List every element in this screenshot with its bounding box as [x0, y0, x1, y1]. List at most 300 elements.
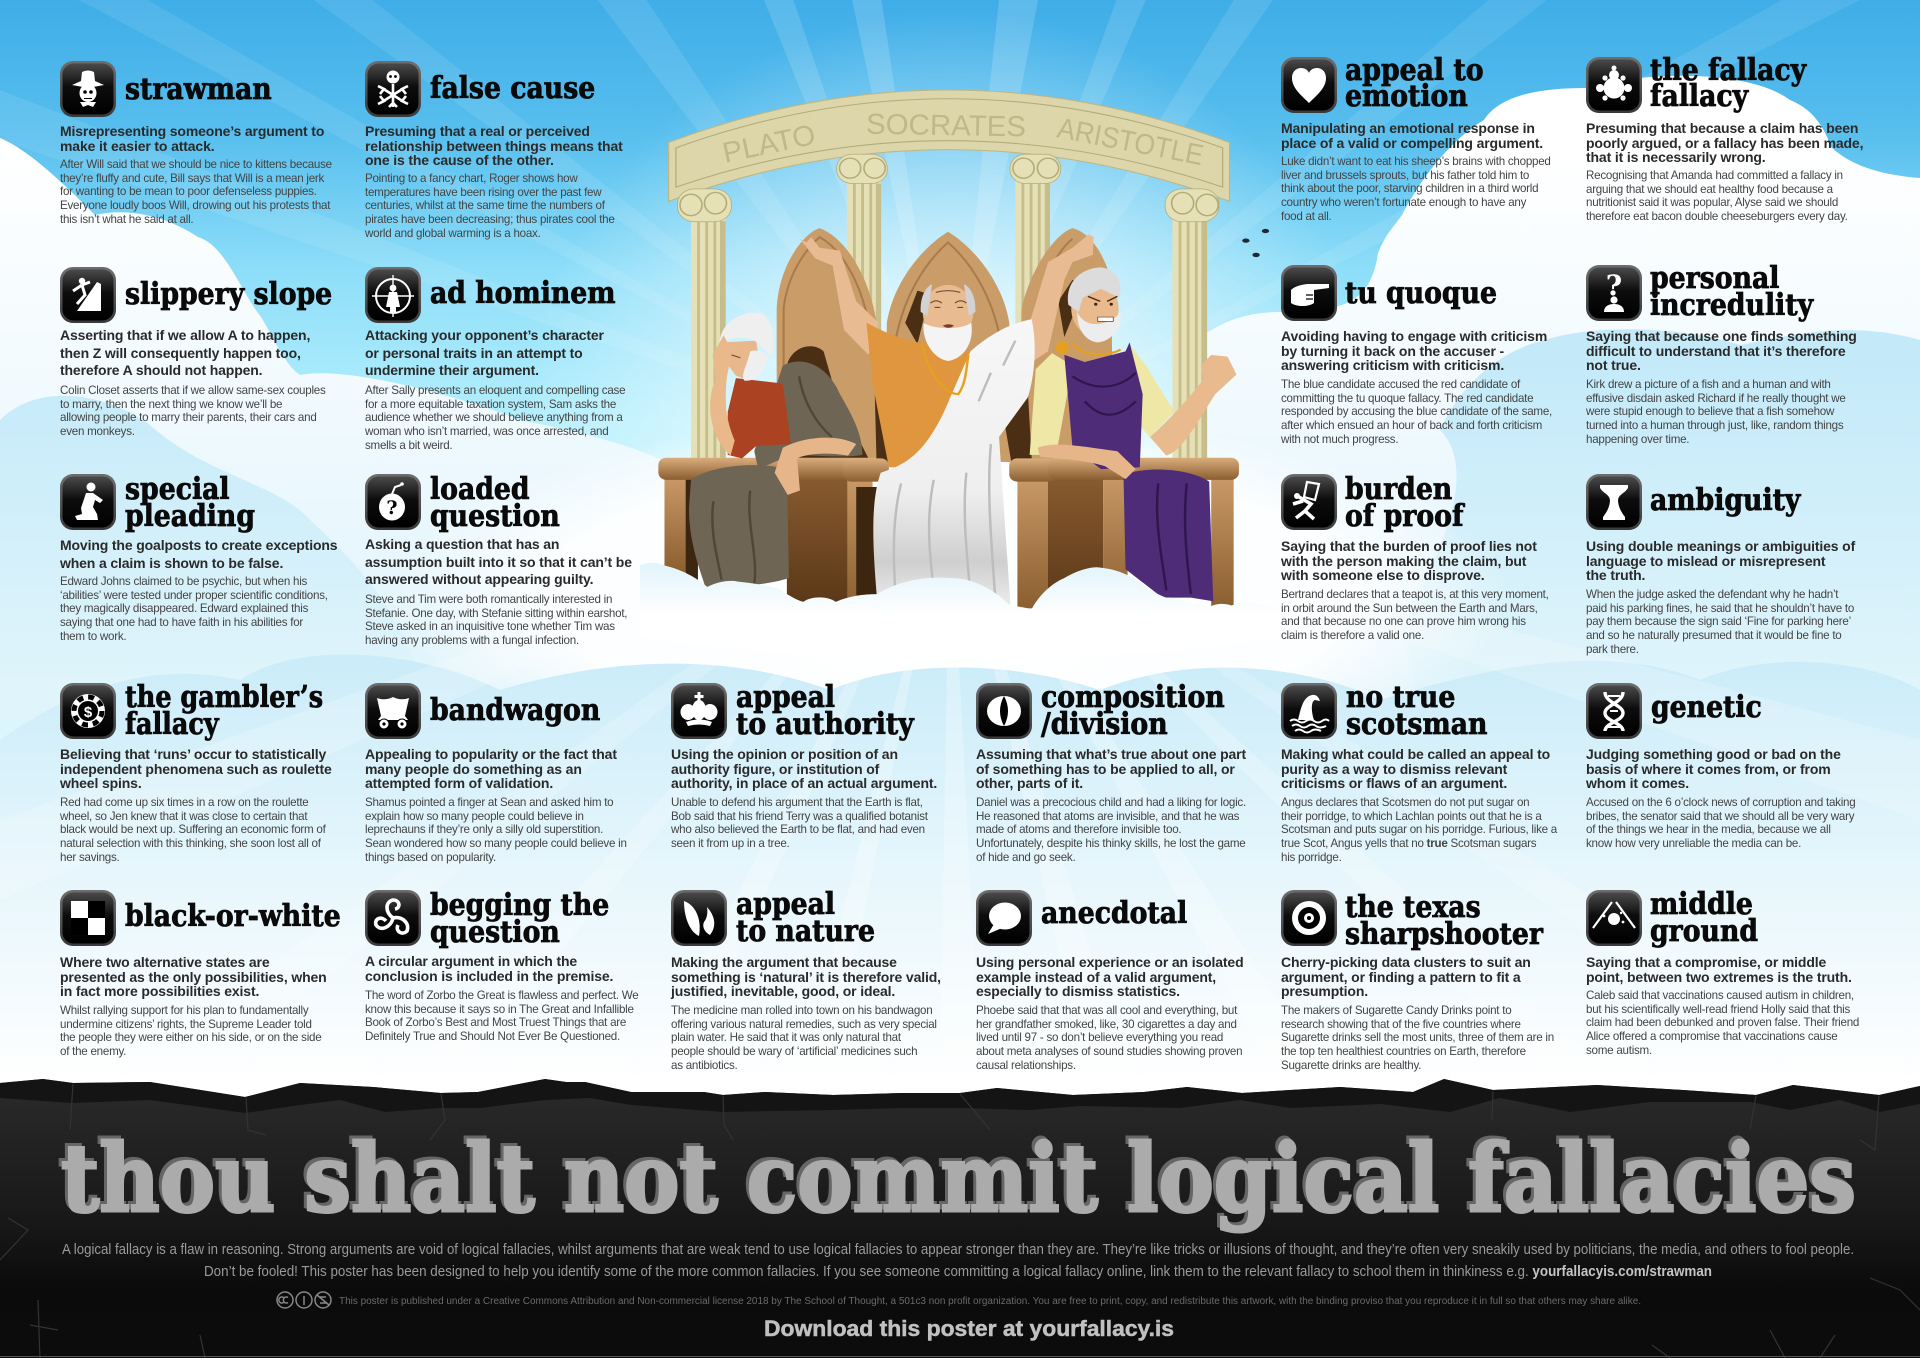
definition: answered without appearing guilty.: [365, 571, 593, 587]
card: ambiguity: [1586, 474, 1871, 659]
example: Steve and Tim were both romantically interested in: [365, 593, 612, 606]
definition: Where two alternative states are: [60, 954, 270, 970]
example: arguing that we should eat healthy food because a: [1586, 183, 1833, 196]
icon: figure on slope: [60, 267, 116, 323]
definition: authority figure, or institution of: [671, 761, 879, 777]
definition: make it easier to attack.: [60, 138, 214, 154]
title: the gambler’s: [124, 680, 323, 715]
example: in orbit around the Sun between the Earth and Mars,: [1281, 602, 1538, 615]
title: [1040, 684, 1224, 738]
example: The blue candidate accused the red candidate of: [1281, 378, 1520, 391]
definition: Presuming that because a claim has been: [1586, 120, 1858, 136]
example: undermine citizens’ rights, the Supreme Leader told: [60, 1018, 312, 1031]
icon: poker chip: $: [84, 704, 93, 721]
icon: bomb: ?: [386, 497, 398, 519]
definition: basis of where it comes from, or from: [1586, 761, 1831, 777]
example: park there.: [1586, 643, 1639, 656]
icon: pointing hand: [1281, 265, 1337, 321]
card: personal incredulity: [1586, 265, 1871, 450]
card: the texas sharpshooter: [1281, 890, 1566, 1075]
title: emotion: [1344, 79, 1467, 114]
example: true Scot, Angus yells that no true Scotsman sugars: [1281, 837, 1536, 850]
footer band with cracked stone edge: [0, 1079, 1920, 1358]
definition: relationship between things means that: [365, 138, 623, 154]
example: and that because no one can prove him wrong his: [1281, 615, 1526, 628]
definition: Making what could be called an appeal to: [1281, 746, 1550, 762]
title: pleading: [124, 499, 254, 534]
title: appeal: [736, 887, 835, 922]
example: even monkeys.: [60, 425, 135, 438]
definition: [60, 746, 332, 791]
definition: Asking a question that has an: [365, 536, 559, 552]
definition: conclusion is included in the premise.: [365, 968, 613, 984]
example: her grandfather smoked, like, 30 cigarettes a day and: [976, 1018, 1237, 1031]
icon: checker: [60, 890, 116, 946]
flying birds: [1242, 229, 1269, 257]
example: for a more equitable taxation system, Sam asks the: [365, 398, 616, 411]
definition: or personal traits in an attempt to: [365, 344, 583, 360]
example: explain how so many people could believe in: [365, 810, 584, 823]
sun rays: [0, 0, 1920, 640]
example: [365, 796, 627, 864]
example: this isn’t what he said at all.: [60, 213, 193, 226]
example: Everyone loudly boos Will, drowing out his protests that: [60, 199, 330, 212]
example: Steve asked in an inquisitive tone whether Tim was: [365, 620, 615, 633]
icon: target: [1281, 890, 1337, 946]
example: Unfortunately, despite his thinky skills, he lost the game: [976, 837, 1245, 850]
icon: heart: [1281, 57, 1337, 113]
definition: [1586, 747, 1841, 791]
definition: [365, 123, 623, 168]
definition: answering criticism with criticism.: [1281, 357, 1504, 373]
card: appeal to emotion: [1281, 57, 1566, 225]
icon: scarecrow: [60, 61, 116, 117]
card: middle ground: [1586, 890, 1871, 1060]
example: things based on popularity.: [365, 851, 496, 864]
license text: This poster is published under a Creative Commons Attribution and Non-commercial license 2018 by The School of Thought, a 501c3 non profit organization. You are free to print, copy, and redistribute this artwork, with the binding proviso that you reproduce it in full so that others may share alike.: [339, 1296, 1641, 1307]
icon: wagon: [365, 683, 421, 739]
example: [976, 796, 1246, 865]
title: [1344, 894, 1542, 948]
title: [1650, 265, 1813, 319]
title: [1346, 684, 1487, 738]
definition: [671, 955, 941, 999]
intro text: Don’t be fooled! This poster has been designed to help you identify some of the more common fallacies. If you see someone committing a logical fallacy online, link them to the relevant fallacy to school them in thinkiness e.g. yourfallacyis.com/strawman: [204, 1263, 1712, 1280]
example: Red had come up six times in a row on the roulette: [60, 796, 308, 809]
icon: leaves: [671, 890, 727, 946]
card: loaded question: [365, 472, 632, 647]
definition: Using the opinion or position of an: [671, 746, 898, 762]
icon: question mark and person: [1586, 265, 1642, 321]
definition: wheel spins.: [60, 775, 142, 791]
definition: not true.: [1586, 357, 1641, 373]
title: incredulity: [1650, 288, 1813, 323]
definition: [1281, 329, 1547, 373]
title: anecdotal: [1040, 896, 1187, 931]
example: wheel, so Jen knew that it was close to certain that: [60, 810, 307, 823]
definition: something is ‘natural’ it is therefore valid,: [671, 969, 941, 985]
definition: many people do something as an: [365, 761, 582, 777]
title: composition: [1040, 680, 1224, 715]
example: Sean wondered how so many people could believe in: [365, 837, 627, 850]
title: to authority: [736, 707, 913, 742]
example: The medicine man rolled into town on his bandwagon: [671, 1004, 932, 1017]
example: saying that one had to have faith in his abilities for: [60, 616, 303, 629]
title: appeal: [736, 680, 835, 715]
title: sharpshooter: [1344, 917, 1542, 952]
example: her savings.: [60, 851, 120, 864]
definition: presented as the only possibilities, when: [60, 969, 327, 985]
example: Bob said that his friend Terry was a qualified botanist: [671, 810, 928, 823]
example: [60, 158, 332, 226]
example: [1586, 378, 1846, 447]
definition: independent phenomena such as roulette: [60, 761, 332, 777]
definition: Avoiding having to engage with criticism: [1281, 328, 1547, 344]
example: offering various natural remedies, such as very special: [671, 1018, 937, 1031]
definition: Manipulating an emotional response in: [1281, 120, 1535, 136]
example: [365, 593, 627, 647]
example: after which ensued an hour of back and forth criticism: [1281, 419, 1542, 432]
example: Scotsman and puts sugar on his porridge. Furious, like a: [1281, 823, 1557, 836]
card: the fallacy fallacy: [1586, 57, 1871, 227]
example: [1281, 796, 1557, 865]
card: genetic: [1586, 683, 1871, 853]
columns and arch: [669, 90, 1230, 466]
card: slippery slope: [60, 267, 332, 438]
title: scotsman: [1346, 707, 1487, 742]
example: [365, 384, 626, 452]
Plato: [689, 313, 862, 587]
title: slippery slope: [124, 277, 332, 312]
card: false cause: [365, 61, 623, 240]
title: personal: [1650, 261, 1779, 296]
title: special: [124, 472, 229, 507]
definition: [60, 123, 324, 154]
example: their porridge, to which Lachlan points out that he is a: [1281, 810, 1542, 823]
example: who also believed the Earth to be flat, and had even: [671, 823, 925, 836]
example: they’re fluffy and cute, Bill says that Will is a mean jerk: [60, 172, 324, 185]
example: Book of Zorbo’s Best and Most Truest Things that are: [365, 1016, 626, 1029]
icon: crosshair: [365, 267, 421, 323]
example: natural selection with this thinking, she soon lost all of: [60, 837, 321, 850]
definition: the truth.: [1586, 567, 1645, 583]
definition: therefore A should not happen.: [60, 362, 262, 378]
example: Daniel was a precocious child and had a liking for logic.: [976, 796, 1246, 809]
definition: when a claim is shown to be false.: [60, 555, 283, 571]
definition: criticisms or flaws of an argument.: [1281, 775, 1507, 791]
title: black-or-white: [124, 899, 340, 934]
example: woman who isn’t married, was once arrested, and: [365, 425, 608, 438]
card: begging the question: [365, 890, 650, 1046]
example: to marry, then the next thing we know we’ll be: [60, 398, 282, 411]
Aristotle: [1030, 267, 1236, 601]
definition: difficult to understand that it’s therefore: [1586, 343, 1845, 359]
definition: that it is necessarily wrong.: [1586, 149, 1766, 165]
example: some autism.: [1586, 1044, 1652, 1057]
card: tu quoque: [1281, 265, 1566, 450]
title: appeal to: [1344, 53, 1483, 88]
example: of hide and go seek.: [976, 851, 1075, 864]
title: tu quoque: [1344, 276, 1497, 311]
definition: Making the argument that because: [671, 954, 897, 970]
definition: Assuming that what’s true about one part: [976, 746, 1246, 762]
icon: overlapping circles: [976, 683, 1032, 739]
title: the fallacy: [1650, 53, 1806, 88]
example: paid his parking fines, he said that he shouldn’t have to: [1586, 602, 1854, 615]
icon: poker chip: [60, 683, 116, 739]
example: research showing that of the five countries where: [1281, 1018, 1521, 1031]
title: [1650, 58, 1806, 110]
definition: Judging something good or bad on the: [1586, 746, 1841, 762]
example: country who weren’t fortunate enough to have any: [1281, 196, 1526, 209]
example: black would be next up. Suffering an economic form of: [60, 823, 326, 836]
card: ad hominem: [365, 267, 626, 452]
title: ambiguity: [1650, 483, 1800, 518]
title: genetic: [1650, 690, 1761, 725]
example: [671, 796, 928, 850]
definition: [60, 955, 327, 999]
definition: then Z will consequently happen too,: [60, 344, 301, 360]
title: [124, 680, 323, 742]
example: When the judge asked the defendant why he hadn’t: [1586, 588, 1838, 601]
example: they magically disappeared. Edward explained this: [60, 602, 308, 615]
example: the top ten healthiest countries on Earth, therefore: [1281, 1045, 1526, 1058]
definition: of something has to be applied to all, or: [976, 761, 1235, 777]
example: seen it from up in a tree.: [671, 837, 790, 850]
definition: by turning it back on the accuser -: [1281, 343, 1504, 359]
example: [365, 989, 638, 1044]
definition: place of a valid or compelling argument.: [1281, 134, 1543, 150]
icon: figure under teapot block: [1281, 474, 1337, 530]
title: [430, 472, 560, 534]
example: them to work.: [60, 630, 126, 643]
example: smells a bit weird.: [365, 439, 452, 452]
definition: Cherry-picking data clusters to suit an: [1281, 954, 1531, 970]
title: burden: [1344, 472, 1452, 507]
title: fallacy: [1650, 79, 1748, 114]
example: Whilst rallying support for his plan to fundamentally: [60, 1004, 308, 1017]
example: Caleb said that vaccinations caused autism in children,: [1586, 989, 1854, 1002]
example: people should be wary of ‘artificial’ medicines such: [671, 1045, 917, 1058]
definition: [976, 955, 1244, 999]
creative commons icons: [277, 1292, 331, 1308]
definition: [365, 327, 604, 378]
example: Luke didn’t want to eat his sheep’s brains with chopped: [1281, 155, 1551, 168]
example: lived until 97 - so don’t believe everything you read: [976, 1031, 1223, 1044]
icon: road and splat: [1586, 890, 1642, 946]
example: nutritionist said it was popular, Alyse said we should: [1586, 196, 1838, 209]
example: about meta analyses of sound studies showing proven: [976, 1045, 1242, 1058]
definition: Moving the goalposts to create exceptions: [60, 537, 337, 553]
example: made of atoms and therefore invisible too.: [976, 823, 1181, 836]
title: ground: [1650, 914, 1758, 949]
example: [60, 796, 326, 864]
example: [60, 575, 328, 643]
example: After Sally presents an eloquent and compelling case: [365, 384, 625, 397]
example: [1281, 588, 1549, 643]
definition: presumption.: [1281, 983, 1368, 999]
definition: [365, 746, 617, 791]
icon: vase and faces: [1586, 474, 1642, 530]
title: strawman: [124, 72, 271, 107]
example: [1586, 989, 1859, 1058]
icon: triskele: [365, 890, 421, 946]
example: pirates have been decreasing; thus pirates cool the: [365, 213, 615, 226]
example: audience whether we should believe anything from a: [365, 411, 623, 424]
example: but his scientifically well-read friend Holly said that this: [1586, 1003, 1850, 1016]
example: [976, 1004, 1242, 1073]
definition: language to mislead or misrepresent: [1586, 553, 1825, 569]
arch inscriptions: PLATO: [720, 119, 818, 170]
example: Alice offered a compromise that vaccinations cause: [1586, 1030, 1838, 1043]
card: composition/division: [976, 683, 1261, 868]
definition: [60, 327, 310, 378]
title: question: [430, 915, 559, 950]
example: having any problems with a fungal infection.: [365, 634, 579, 647]
example: [1281, 155, 1551, 224]
example: [1586, 169, 1848, 224]
icon: skull snowflake: [365, 61, 421, 117]
definition: Asserting that if we allow A to happen,: [60, 327, 310, 343]
example: turned into a human through just, like, random things: [1586, 419, 1843, 432]
definition: [1281, 539, 1537, 583]
icon: speech bubble: [976, 890, 1032, 946]
card: burden of proof: [1281, 474, 1566, 646]
definition: Saying that because one finds something: [1586, 328, 1857, 344]
example: and so he naturally presumed that it would be fine to: [1586, 629, 1842, 642]
icon: DNA helix: [1586, 683, 1642, 739]
title: [124, 472, 255, 534]
card: special pleading: [60, 472, 337, 643]
example: Unable to defend his argument that the Earth is flat,: [671, 796, 923, 809]
definition: whom it comes.: [1586, 775, 1689, 791]
definition: Believing that ‘runs’ occur to statistically: [60, 746, 326, 762]
title: fallacy: [124, 707, 218, 742]
card: anecdotal: [976, 890, 1261, 1075]
clouds: [0, 76, 1920, 1090]
example: He reasoned that atoms are invisible, and that he was: [976, 810, 1239, 823]
example: his porridge.: [1281, 851, 1342, 864]
definition: example instead of a valid argument,: [976, 969, 1216, 985]
example: committing the tu quoque fallacy. The red candidate: [1281, 392, 1533, 405]
definition: attempted form of validation.: [365, 775, 553, 791]
definition: undermine their argument.: [365, 362, 539, 378]
title: the texas: [1344, 890, 1480, 925]
example: Bertrand declares that a teapot is, at this very moment,: [1281, 588, 1549, 601]
example: with not much progress.: [1281, 433, 1398, 446]
definition: [976, 747, 1246, 791]
title: loaded: [430, 472, 529, 507]
title: middle: [1650, 887, 1752, 922]
example: Colin Closet asserts that if we allow same-sex couples: [60, 384, 326, 397]
example: of the enemy.: [60, 1045, 126, 1058]
example: Stefanie. One day, with Stefanie sitting within earshot,: [365, 607, 627, 620]
definition: Misrepresenting someone’s argument to: [60, 123, 324, 139]
example: pay them because the sign said ‘Fine for parking here’: [1586, 615, 1851, 628]
example: After Will said that we should be nice to kittens because: [60, 158, 332, 171]
definition: [365, 954, 613, 984]
example: food at all.: [1281, 210, 1332, 223]
definition: Using double meanings or ambiguities of: [1586, 538, 1855, 554]
example: for wanting to be mean to poor defenseless puppies.: [60, 185, 317, 198]
arch inscriptions: [720, 109, 1206, 172]
example: Definitely True and Should Not Ever Be Questioned.: [365, 1030, 620, 1043]
example: centuries, whilst at the same time the numbers of: [365, 199, 605, 212]
example: Recognising that Amanda had committed a fallacy in: [1586, 169, 1843, 182]
definition: Saying that a compromise, or middle: [1586, 954, 1826, 970]
definition: [1281, 121, 1543, 150]
example: claim is therefore a valid one.: [1281, 629, 1424, 642]
example: Angus declares that Scotsmen do not put sugar on: [1281, 796, 1529, 809]
icon: fractal: [1586, 57, 1642, 113]
card: no true scotsman: [1281, 683, 1566, 868]
example: allowing people to marry their parents, their cars and: [60, 411, 317, 424]
example: [1586, 796, 1855, 851]
definition: other, parts of it.: [976, 775, 1083, 791]
icon: crown: [671, 683, 727, 739]
card: strawman: [60, 61, 332, 226]
example: Sugarette drinks sell the most units, three of them are in: [1281, 1031, 1554, 1044]
title: [1344, 476, 1463, 530]
example: ‘abilities’ were tested under proper scientific conditions,: [60, 589, 328, 602]
definition: [1586, 539, 1855, 583]
title: ad hominem: [430, 276, 615, 311]
icon: loch ness monster: [1281, 683, 1337, 739]
example: [365, 172, 615, 240]
example: Edward Johns claimed to be psychic, but when his: [60, 575, 307, 588]
title: [1650, 891, 1758, 945]
example: effusive disdain asked Richard if he really thought we: [1586, 392, 1846, 405]
intro text: [62, 1241, 1854, 1280]
definition: Saying that the burden of proof lies not: [1281, 538, 1537, 554]
definition: Appealing to popularity or the fact that: [365, 746, 617, 762]
title: [736, 891, 874, 945]
card: appeal to authority: [671, 680, 937, 850]
title: question: [430, 499, 559, 534]
example: therefore eat bacon double cheeseburgers every day.: [1586, 210, 1848, 223]
example: happening over time.: [1586, 433, 1689, 446]
example: bribes, the senator said that we should all be very wary: [1586, 810, 1854, 823]
definition: A circular argument in which the: [365, 953, 577, 969]
example: [1281, 378, 1552, 447]
definition: [1586, 329, 1857, 373]
definition: Attacking your opponent’s character: [365, 327, 604, 343]
definition: one is the cause of the other.: [365, 152, 554, 168]
example: Kirk drew a picture of a fish and a human and with: [1586, 378, 1831, 391]
definition: [1586, 955, 1852, 984]
title: no true: [1346, 680, 1455, 715]
title: to nature: [736, 914, 874, 949]
throne backs: [777, 228, 1113, 466]
arch inscriptions: SOCRATES: [866, 109, 1026, 143]
card: the gambler's fallacy: [60, 680, 332, 864]
example: leprechauns if they’re only a silly old superstition.: [365, 823, 603, 836]
example: as antibiotics.: [671, 1059, 738, 1072]
definition: [671, 746, 937, 791]
definition: Using personal experience or an isolated: [976, 954, 1244, 970]
example: think about the poor, starving children in a third world: [1281, 182, 1538, 195]
definition: [1586, 121, 1863, 164]
example: causal relationships.: [976, 1059, 1076, 1072]
definition: Presuming that a real or perceived: [365, 123, 590, 139]
icon: bomb: [365, 474, 421, 530]
definition: in fact more possibilities exist.: [60, 983, 259, 999]
definition: assumption built into it so that it can’t be: [365, 554, 632, 570]
definition: especially to dismiss statistics.: [976, 983, 1180, 999]
example: Pointing to a fancy chart, Roger shows how: [365, 172, 577, 185]
definition: [60, 537, 337, 571]
example: know how very unreliable the media can be.: [1586, 837, 1801, 850]
